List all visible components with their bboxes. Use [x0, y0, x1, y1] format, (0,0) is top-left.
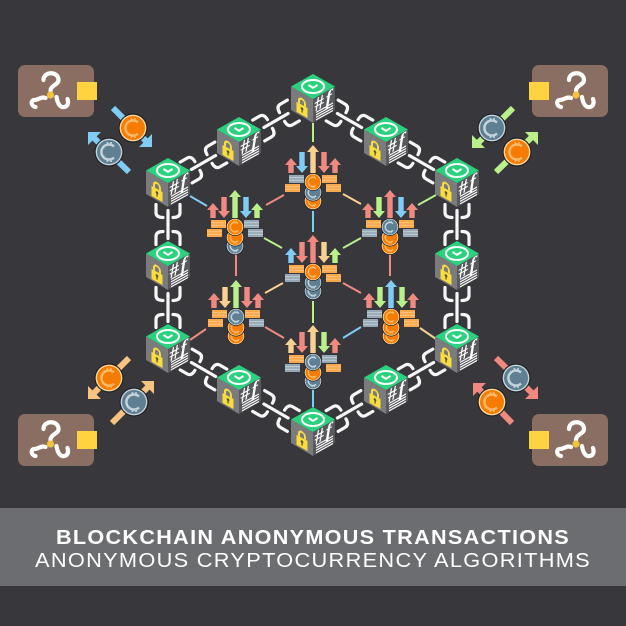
block cube: bottom: f: [326, 418, 334, 443]
block cube: right middle: [435, 241, 479, 290]
title banner: [0, 508, 626, 586]
block cube: top: #: [314, 91, 324, 116]
block cube: right corner bottom: f: [470, 335, 478, 360]
block cube: lower left: #: [240, 382, 250, 407]
block cube: left corner bottom: f: [180, 335, 189, 360]
block cube: left middle: [146, 241, 190, 290]
block cube: right corner top: f: [470, 169, 478, 194]
transaction cluster: lower right: [363, 280, 419, 345]
transaction cluster: bottom: [285, 325, 341, 390]
block cube: right corner top: #: [458, 175, 468, 200]
block cube: bottom: [291, 407, 335, 456]
title line 2: ANONYMOUS CRYPTOCURRENCY ALGORITHMS: [35, 550, 591, 572]
block cube: lower right: #: [388, 382, 397, 407]
coin exchange: bottom left: [88, 358, 154, 423]
block cube: right middle: #: [458, 258, 468, 283]
wallet: top right: [529, 65, 608, 117]
block cube: upper left: #: [240, 134, 250, 159]
transaction cluster: center: [285, 235, 341, 300]
transaction cluster: lower left: [208, 280, 264, 345]
title line 1: BLOCKCHAIN ANONYMOUS TRANSACTIONS: [56, 527, 570, 549]
block cube: left corner top: f: [180, 169, 189, 194]
block cube: bottom: #: [314, 424, 324, 449]
block cube: right corner bottom: [435, 324, 479, 373]
block cube: lower left: [217, 365, 261, 414]
block cube: upper right: #: [388, 134, 397, 159]
block cube: left corner top: #: [170, 175, 179, 200]
connector lines between nodes: [190, 123, 436, 407]
wallet: bottom right: [529, 414, 608, 466]
block cube: left middle: f: [180, 252, 189, 277]
block cube: left corner bottom: [146, 324, 190, 373]
block cube: lower right: f: [398, 376, 407, 401]
block cube: lower left: f: [252, 376, 260, 401]
block cube: top: f: [326, 85, 334, 110]
block cube: upper left: f: [252, 128, 260, 153]
transaction cluster: top: [285, 145, 341, 210]
hexagon chain links: [156, 100, 469, 431]
coin exchange: top right: [472, 108, 538, 172]
wallet: bottom left: [18, 414, 97, 466]
block cube: upper right: [364, 117, 408, 166]
block cube: left corner top: [146, 158, 190, 207]
block cube: right corner top: [435, 158, 479, 207]
wallet: top left: [18, 65, 97, 117]
block cube: upper right: f: [398, 128, 407, 153]
block cube: right corner bottom: #: [458, 341, 468, 366]
coin exchange: bottom right: [473, 358, 538, 423]
transaction cluster: upper left: [207, 190, 263, 255]
block cube: left corner bottom: #: [170, 341, 179, 366]
block cube: right middle: f: [470, 252, 478, 277]
coin exchange: top left: [88, 108, 152, 172]
block cube: top: [291, 74, 335, 123]
transaction cluster: upper right: [362, 190, 418, 255]
block cube: left middle: #: [170, 258, 179, 283]
block cube: upper left: [217, 117, 261, 166]
block cube: lower right: [364, 365, 408, 414]
